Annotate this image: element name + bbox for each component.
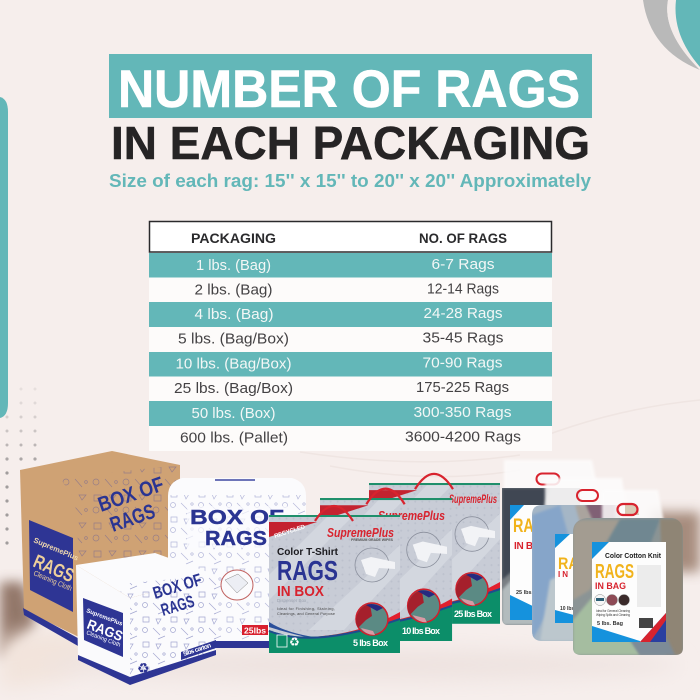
table row: 25 lbs <box>149 376 552 401</box>
5 lbs rags box: PREMIUM GRADE WIPES <box>351 538 394 542</box>
kraft box label: RAGS <box>30 551 77 587</box>
title banner: NUMBER OF RAGS <box>118 60 580 119</box>
table row: 600 lbs <box>149 426 552 451</box>
small box label: Cleaning Cloth <box>85 630 121 649</box>
recycle icon: ♻ <box>137 660 150 676</box>
table row: 2 lbs: 12-14 Rags <box>427 282 499 298</box>
subtitle: Size of each rag: 15'' x 15'' to 20'' x 20'' Approximately <box>109 171 591 191</box>
5 lbs rags box: Color T-Shirt <box>277 546 338 558</box>
background wood surface <box>0 400 700 690</box>
kraft box of rags: RAGS <box>107 500 158 537</box>
kraft box label <box>29 520 80 612</box>
small box label: SupremePlus <box>85 608 124 628</box>
5 lbs rags box: IN BOX <box>277 583 324 600</box>
bag label: IN BAG <box>595 581 626 592</box>
title second line: IN EACH PACKAGING <box>111 117 590 169</box>
table row: 50 lbs: 300-350 Rags <box>414 405 512 421</box>
25 lbs rags box <box>369 474 500 624</box>
25 lbs rags box: SupremePlus <box>449 492 497 506</box>
bag label: RAG <box>558 554 590 573</box>
5 lbs rags bag <box>573 490 683 655</box>
bag label <box>510 505 545 620</box>
table row: 2 lbs: 2 lbs. (Bag) <box>194 282 272 298</box>
table row: 4 lbs: 24-28 Rags <box>424 306 502 322</box>
table row: 600 lbs: 3600-4200 Rags <box>405 430 521 446</box>
table row: 5 lbs: 35-45 Rags <box>422 330 504 346</box>
5 lbs rags box: ♻ <box>289 635 300 649</box>
table row: 1 lbs: 1 lbs. (Bag) <box>196 258 271 274</box>
small 5 lbs box of rags <box>76 553 216 685</box>
table row: 2 lbs <box>149 278 552 302</box>
5 lbs rags box: RAGS <box>277 555 338 586</box>
white 25 lbs box of rags: RAGS <box>205 528 267 550</box>
table row: 10 lbs: 70-90 Rags <box>422 356 502 372</box>
bag label: Wiping Spills and Cleaning <box>596 613 630 617</box>
bag label <box>555 534 600 623</box>
small box label: RAGS <box>85 616 125 644</box>
kraft box of rags: BOX OF <box>95 473 167 517</box>
table header: NO. OF RAGS <box>419 231 507 246</box>
bag label: Color Cotton Knit <box>605 551 661 560</box>
table <box>149 222 552 451</box>
table header <box>150 222 552 252</box>
white 25 lbs box of rags <box>168 478 306 648</box>
tag 5lbs carton: 5lbs carton <box>182 642 212 658</box>
decoration: top-right crescents <box>643 0 700 70</box>
table row: 5 lbs <box>149 327 552 352</box>
25 lbs rags box: 25 lbs Box <box>454 609 492 619</box>
kraft box label: Cleaning Cloth <box>32 569 73 593</box>
5 lbs rags box: Dispenser Box <box>277 598 307 603</box>
5 lbs rags box <box>269 506 400 653</box>
bag label: RAG <box>513 516 545 537</box>
10 lbs rags box <box>320 489 452 641</box>
bag label: Ideal for General Cleaning <box>596 609 630 613</box>
kraft box of rags <box>20 451 180 650</box>
10 lbs rags box: 10 lbs Box <box>402 626 440 636</box>
10 lbs rags box: SupremePlus <box>378 508 445 523</box>
bag label: 25 lbs <box>516 590 532 596</box>
decoration: dot grid <box>5 388 37 545</box>
decoration: left teal panel <box>0 97 8 418</box>
table row: 1 lbs: 6-7 Rags <box>432 257 494 273</box>
table row: 4 lbs: 4 lbs. (Bag) <box>194 307 274 323</box>
bag label: IN BA <box>514 541 540 552</box>
small 5 lbs box of rags: RAGS <box>159 592 197 620</box>
bag label <box>592 542 666 642</box>
table row: 25 lbs: 25 lbs. (Bag/Box) <box>174 381 293 397</box>
table row: 5 lbs: 5 lbs. (Bag/Box) <box>178 332 289 348</box>
table header: PACKAGING <box>191 231 276 246</box>
5 lbs rags box: 5 lbs Box <box>353 638 388 648</box>
25 lbs rags bag <box>502 460 600 625</box>
table row: 50 lbs <box>149 401 552 426</box>
5 lbs rags box: SupremePlus <box>327 525 394 540</box>
table row: 10 lbs: 10 lbs. (Bag/Box) <box>176 356 292 372</box>
table row: 10 lbs <box>149 352 552 376</box>
5 lbs rags box: RECYCLED <box>274 524 307 540</box>
small box label <box>83 598 125 657</box>
soft ground shadow <box>40 649 680 681</box>
kraft box label: SupremePlus <box>32 536 80 563</box>
table row: 1 lbs <box>149 253 552 278</box>
bag label: RAGS <box>595 561 634 583</box>
bag label: 5 lbs. Bag <box>597 621 623 627</box>
5 lbs rags box: Ideal for Finishing, Staining, <box>277 607 335 611</box>
table row: 25 lbs: 175-225 Rags <box>416 380 509 396</box>
10 lbs rags bag <box>532 478 628 641</box>
bag label: IN BA <box>558 570 588 579</box>
white 25 lbs box of rags: BOX OF <box>190 507 284 529</box>
table row: 50 lbs: 50 lbs. (Box) <box>192 406 276 422</box>
bag label: 10 lbs <box>560 606 574 612</box>
table row: 600 lbs: 600 lbs. (Pallet) <box>180 430 288 446</box>
small 5 lbs box of rags: BOX OF <box>151 570 204 603</box>
5 lbs rags box: Cleanings, and General Purpose <box>277 612 335 616</box>
weight tag 25lbs: 25lbs <box>244 626 266 636</box>
table row: 4 lbs <box>149 302 552 327</box>
